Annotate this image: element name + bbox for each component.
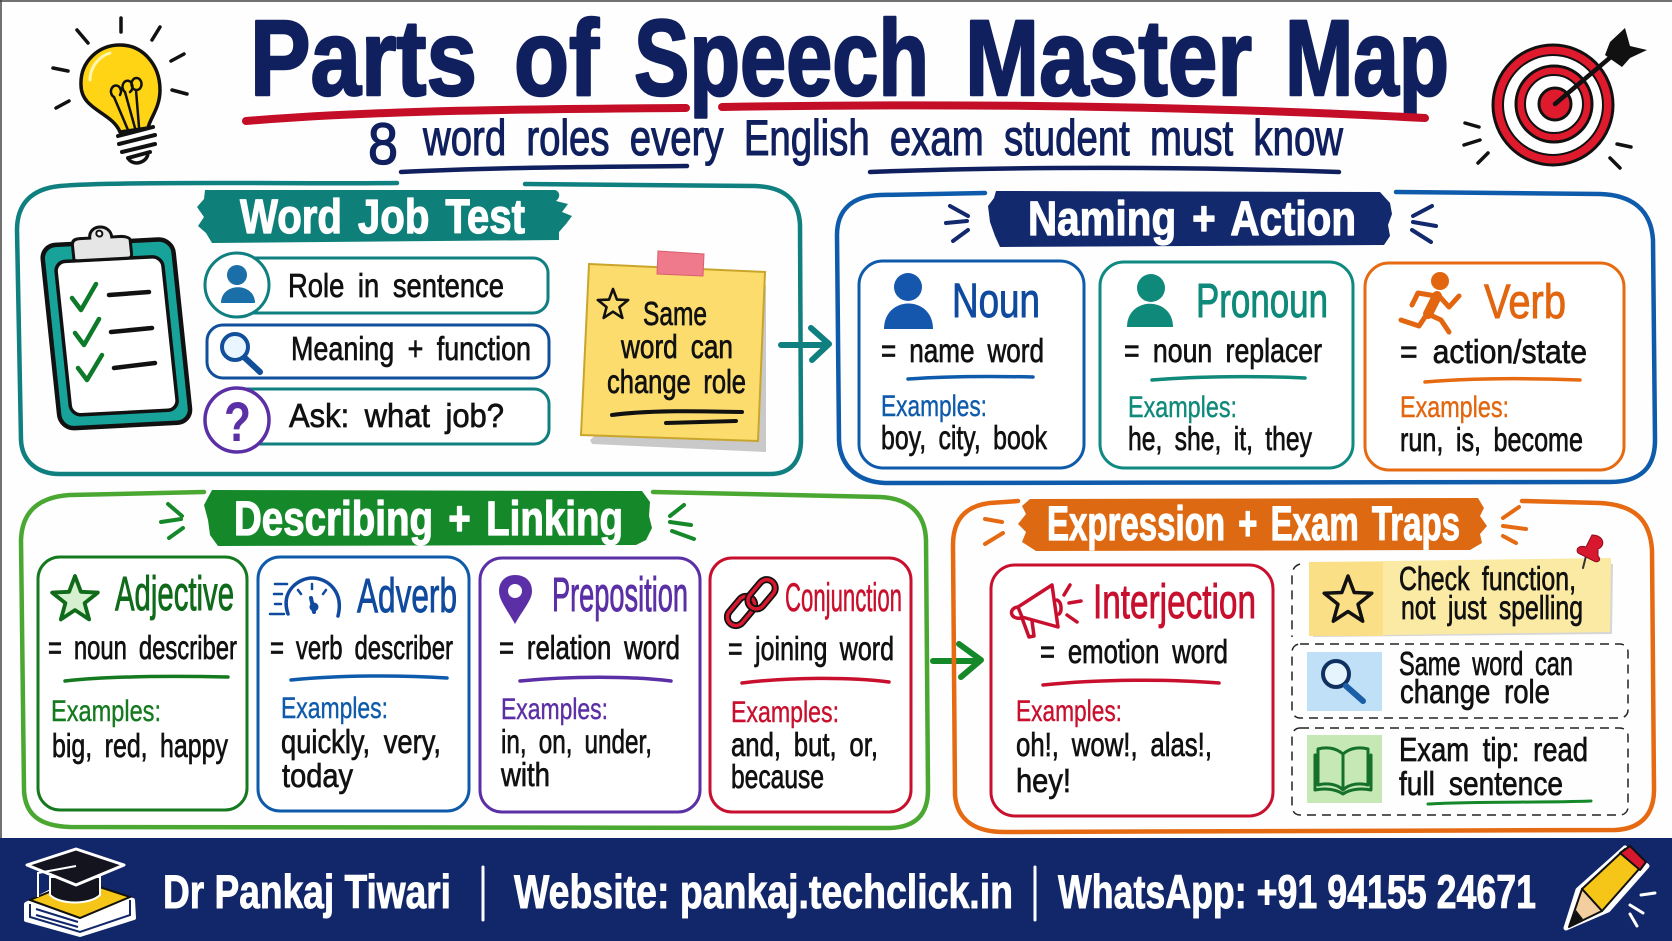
- card: noun: [859, 261, 1084, 468]
- icon: speedometer: [270, 578, 339, 616]
- examples: Examples:: [501, 693, 608, 726]
- heading: Naming + Action: [1028, 193, 1356, 246]
- definition: = noun replacer: [1124, 332, 1322, 369]
- sticky note: Same: [643, 295, 707, 332]
- pill: role in sentence: Role in sentence: [288, 267, 504, 304]
- examples: Examples:: [1128, 391, 1237, 424]
- card: conjunction: because: [731, 758, 824, 795]
- card: conjunction: [710, 558, 911, 812]
- definition: = verb describer: [270, 629, 453, 666]
- examples: Examples:: [281, 692, 388, 725]
- pill: ask what job: ?: [224, 390, 251, 453]
- label: conjunction: Conjunction: [785, 576, 902, 620]
- panel: expression and exam traps: [953, 498, 1654, 832]
- title: Map: [1285, 0, 1449, 118]
- tip: check function: not just spelling: [1401, 589, 1583, 626]
- card: conjunction: and, but, or,: [731, 726, 878, 763]
- accent rays: [161, 504, 694, 539]
- pill: meaning and function: [207, 325, 549, 378]
- heading: Describing + Linking: [234, 493, 623, 546]
- examples: Examples:: [731, 696, 839, 729]
- examples: Examples:: [51, 695, 161, 728]
- title: Master: [965, 0, 1252, 118]
- panel outline: [953, 501, 1654, 832]
- tip: exam tip read full sentence: full sentence: [1399, 765, 1563, 802]
- sticky note: change role: [607, 363, 746, 400]
- title: of: [514, 0, 600, 118]
- icon: chain link: [724, 573, 779, 632]
- subtitle underline: [401, 166, 1339, 172]
- examples: Examples:: [1016, 695, 1122, 728]
- tip: same word can change role: Same word can: [1399, 645, 1573, 682]
- pill: ask what job: Ask: what job?: [289, 397, 504, 434]
- panel: describing and linking: [21, 490, 928, 828]
- heading banner: [988, 191, 1392, 247]
- sticky note: word can: [620, 328, 733, 365]
- definition: = relation word: [499, 629, 680, 666]
- card: preposition: [480, 558, 700, 812]
- footer bar: [0, 838, 1672, 941]
- panel outline: [17, 183, 801, 474]
- whatsapp: WhatsApp: +91 94155 24671: [1058, 865, 1536, 918]
- tip: exam tip read full sentence: [1292, 728, 1628, 815]
- label: interjection: Interjection: [1093, 576, 1256, 629]
- card: verb: run, is, become: [1400, 421, 1583, 458]
- author name: Dr Pankaj Tiwari: [163, 865, 451, 918]
- tip: exam tip read full sentence: Exam tip: read: [1399, 731, 1588, 768]
- arrow: teal: [781, 328, 829, 360]
- icon: push pin: [1577, 535, 1603, 568]
- arrow: green: [933, 644, 981, 677]
- heading: Word Job Test: [240, 191, 525, 244]
- icon: location pin: [499, 575, 532, 624]
- card: adverb: today: [282, 757, 353, 794]
- icon: clipboard: [40, 223, 191, 429]
- website: Website: pankaj.techclick.in: [514, 865, 1013, 918]
- title: Parts: [250, 0, 477, 118]
- heading banner: [204, 490, 652, 546]
- title underline: [246, 105, 1425, 121]
- title: [250, 0, 1449, 118]
- label: preposition: Preposition: [552, 569, 688, 622]
- tip: same word can change role: [1292, 644, 1628, 718]
- heading banner: [197, 190, 572, 243]
- icon: person blue: [884, 273, 933, 329]
- label: adjective: Adjective: [115, 568, 234, 621]
- tip: check function: [1292, 558, 1613, 637]
- card: preposition: with: [500, 756, 550, 793]
- card: adjective: [38, 557, 247, 810]
- card: interjection: [991, 565, 1273, 816]
- accent rays: [985, 507, 1526, 544]
- pill: ask what job: [205, 388, 549, 453]
- label: adverb: Adverb: [357, 570, 457, 623]
- panel outline: [837, 192, 1655, 483]
- card: interjection: hey!: [1016, 762, 1071, 799]
- accent rays: [946, 206, 1436, 242]
- definition: = name word: [881, 332, 1044, 369]
- icon: target with arrow: [1464, 28, 1647, 168]
- heading banner: [1018, 498, 1487, 551]
- card: pronoun: he, she, it, they: [1128, 420, 1312, 457]
- icon: pencil: [1566, 846, 1655, 928]
- card: adjective: big, red, happy: [52, 727, 228, 764]
- card: noun: boy, city, book: [881, 419, 1047, 456]
- examples: Examples:: [1400, 391, 1509, 424]
- icon: light bulb: [53, 18, 187, 163]
- subtitle: [368, 110, 1344, 177]
- label: pronoun: Pronoun: [1196, 275, 1328, 328]
- tip: check function: Check function,: [1399, 560, 1576, 597]
- subtitle: 8: [368, 112, 398, 177]
- heading: Expression + Exam Traps: [1047, 498, 1460, 551]
- card: preposition: in, on, under,: [501, 723, 652, 760]
- subtitle: word roles every English exam student must know: [422, 110, 1344, 166]
- pill: role in sentence: [205, 253, 548, 317]
- pill: meaning and function: Meaning + function: [291, 330, 531, 367]
- sticky note: [581, 251, 766, 452]
- panel: word job test: [17, 183, 829, 474]
- icon: books and graduation cap: [26, 849, 134, 935]
- examples: Examples:: [881, 390, 987, 423]
- tip: same word can change role: change role: [1400, 673, 1550, 710]
- checklist ticks: [72, 284, 155, 380]
- panel: naming and action: [837, 191, 1655, 483]
- card: interjection: oh!, wow!, alas!,: [1016, 726, 1212, 763]
- definition: = noun describer: [48, 629, 237, 666]
- icon: runner: [1401, 272, 1459, 332]
- definition: = emotion word: [1040, 633, 1228, 670]
- icon: megaphone: [1012, 585, 1081, 637]
- panel outline: [21, 492, 928, 828]
- definition: = joining word: [728, 630, 894, 667]
- icon: star green: [52, 576, 98, 619]
- definition: = action/state: [1400, 333, 1587, 370]
- label: noun: Noun: [952, 275, 1040, 328]
- card: adverb: [258, 557, 469, 811]
- label: verb: Verb: [1484, 276, 1566, 329]
- title: Speech: [634, 0, 929, 118]
- icon: person teal: [1127, 274, 1173, 327]
- card: verb: [1365, 263, 1624, 470]
- card: adverb: quickly, very,: [281, 723, 441, 760]
- card: pronoun: [1100, 262, 1353, 468]
